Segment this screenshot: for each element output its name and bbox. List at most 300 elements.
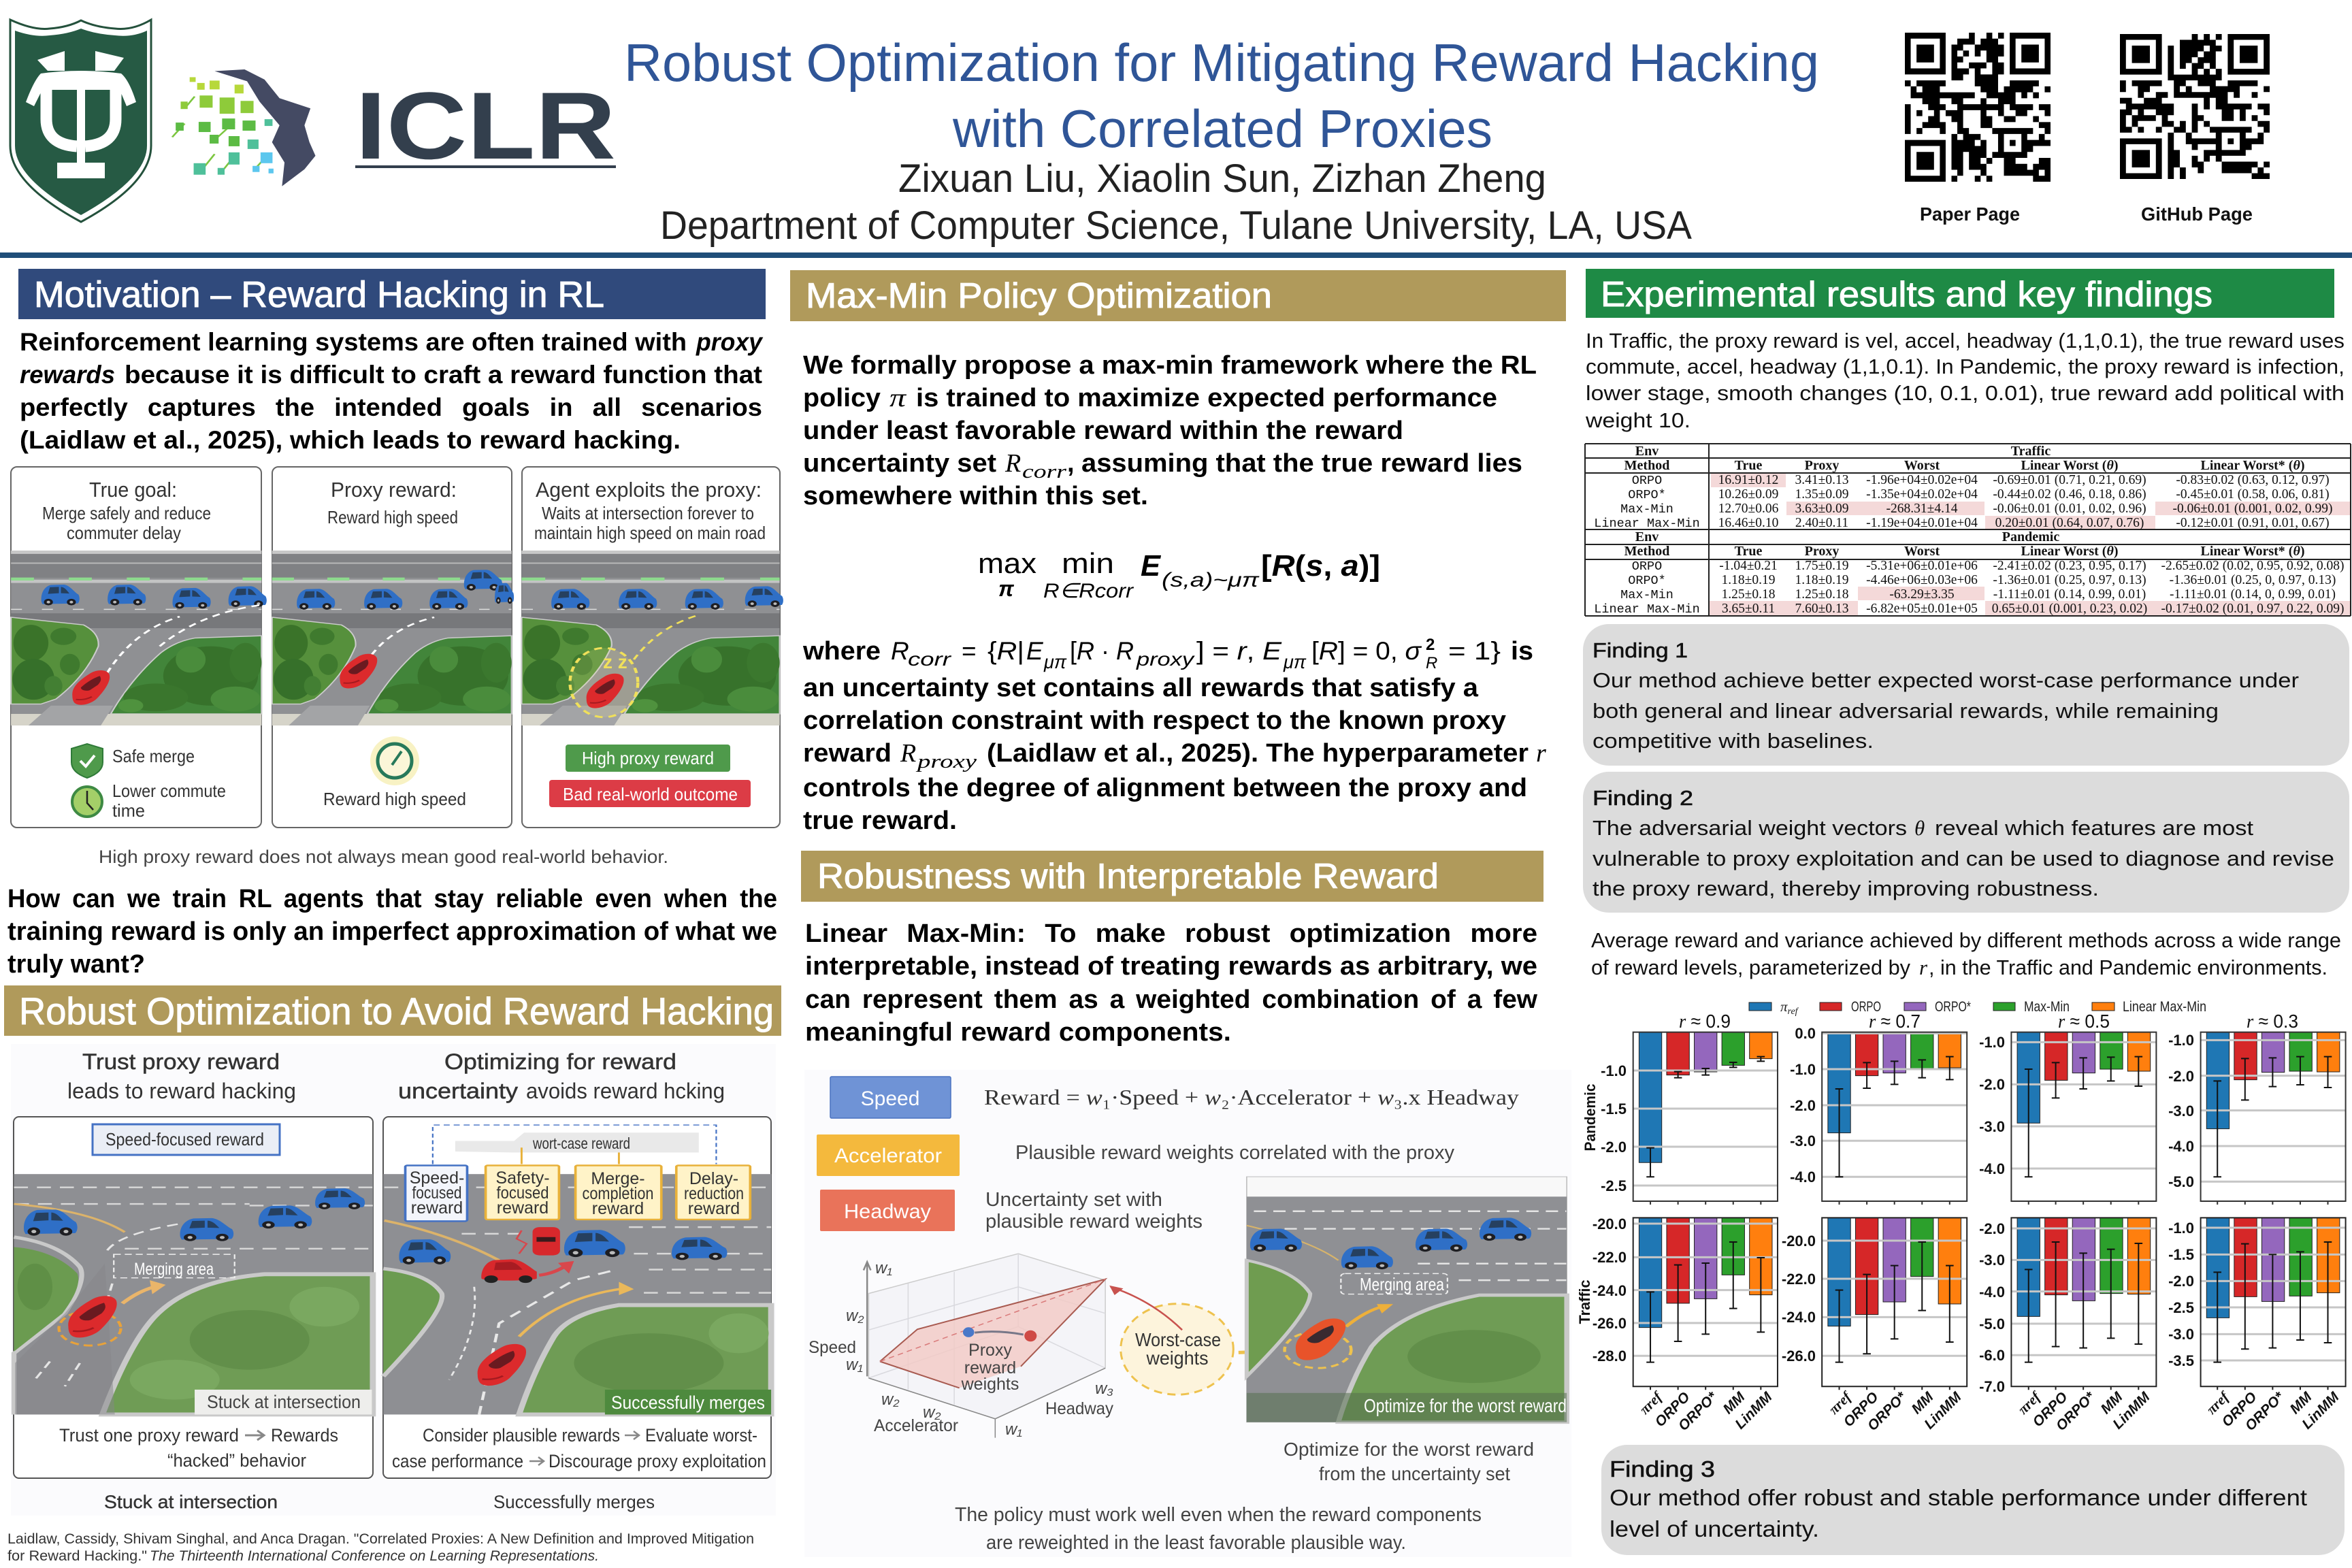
chart: traffic r≈0.9: -22.0 [1592,1249,1627,1266]
chart: traffic r≈0.3: LinMM [2299,1389,2342,1433]
table: results: Max-Min [1620,588,1673,602]
text: plausible weights: Plausible reward weights correlated with the proxy [1015,1142,1454,1164]
text: consider plausible rewards: case performance [392,1451,523,1471]
label: proxy reward weights: reward [964,1358,1016,1377]
chart: traffic r≈0.9: MM [1720,1389,1748,1417]
label: successfully merges overlay: Successfully merges [611,1392,765,1413]
icon: clock [72,787,102,817]
right figure heading: Optimizing for reward [444,1049,676,1074]
panel: robustness [801,851,1571,1557]
chart: traffic r≈0.5: -6.0 [1979,1347,2005,1364]
chart: traffic r≈0.3: ORPO [2219,1389,2260,1430]
chart: traffic r≈0.3: -2.5 [2168,1299,2194,1316]
text block: max-min intro: uncertainty set [803,449,996,478]
text block: max-min intro: corr [1022,461,1066,483]
caption: optimize for worst reward: from the uncertainty set [1319,1463,1510,1484]
chip: accelerator [817,1134,960,1176]
panel: experimental results [1576,269,2351,1555]
chart: traffic r≈0.9: -24.0 [1592,1282,1627,1299]
text block: research question [7,885,777,979]
callout: finding 3: level of uncertainty. [1610,1516,1819,1541]
reward option: merge-completion: Merge- [591,1169,645,1188]
reward option: safety-focused [495,1169,550,1218]
chart: traffic r≈0.9: πref [1636,1388,1666,1418]
QR label: paper: Paper Page [1920,203,2020,225]
chart: pandemic r≈0.7: -1.0 [1790,1061,1816,1078]
text block: chart description: Average reward and variance achieved by different methods across a wide range [1591,928,2341,952]
caption: successfully merges: Successfully merges [493,1492,655,1512]
chart: pandemic r≈0.3 [2168,1011,2346,1205]
table: results: -1.36±0.01 (0.25, 0.97, 0.13) [1993,573,2146,587]
table: results: -1.11±0.01 (0.14, 0.99, 0.01) [1993,587,2146,602]
table: results: -6.82e+05±0.01e+05 [1866,602,1978,616]
table: results: 1.75±0.19 [1795,559,1848,573]
text block: max-min intro: assuming that the true reward lies [1081,449,1522,478]
text block: uncertainty set definition: R [900,739,916,768]
chip: speed [830,1077,951,1118]
table: results: 16.46±0.10 [1718,516,1778,530]
text block: uncertainty set definition: reward [803,739,892,768]
heading: motivation: Motivation – Reward Hacking in RL [34,274,604,315]
chart: pandemic r≈0.9: -1.5 [1601,1100,1627,1117]
table: results: -0.17±0.02 (0.01, 0.97, 0.22, 0.09) [2161,602,2345,616]
text block: max-min intro: somewhere within this set. [803,482,1148,510]
heading: robust optimization: Robust Optimization to Avoid Reward Hacking [19,990,774,1032]
chart: traffic r≈0.3: -1.0 [2168,1220,2194,1237]
panel: max-min [790,270,1566,835]
table: results: 1.25±0.18 [1722,587,1775,602]
badge: bad real-world outcome: Bad real-world outcome [563,784,738,804]
panel: robust optimization [4,985,781,1564]
text block: max-min intro: R [1004,449,1021,478]
chart: pandemic r≈0.5: -4.0 [1979,1160,2005,1177]
chart: traffic r≈0.7: ORPO [1841,1389,1882,1430]
callout: finding 1 [1583,624,2349,766]
table: results: True [1735,458,1762,473]
scene panel: agent exploits the proxy: Agent exploits the proxy: [536,478,762,502]
logo: ICLR brain mark [172,69,316,186]
text block: max-min intro: , [1067,449,1075,478]
table: results: -1.19e+04±0.01e+04 [1866,516,1978,530]
icon: speed gauge [370,736,419,785]
table: results: Method [1624,544,1669,559]
chart: pandemic r≈0.7: -3.0 [1790,1132,1816,1149]
formula: max-min objective: π [998,576,1015,601]
reward option: merge-completion [583,1169,653,1218]
table: results: Linear Max-Min [1594,517,1700,531]
text block: motivation intro: because it is difficult to craft a reward function that [125,361,762,389]
text block: linear max-min [805,919,1537,1047]
text block: uncertainty set definition: ] = r, E [1196,637,1282,665]
panel: motivation [7,269,783,979]
table: results: ORPO* [1628,488,1666,502]
chart: traffic r≈0.5: LinMM [2110,1389,2153,1433]
badge: high proxy reward [566,745,730,772]
badge: bad real-world outcome [549,780,751,807]
text block: max-min intro: is trained to maximize expected performance [916,384,1497,412]
chart: 3D weight space: Speed [808,1338,856,1357]
chart: traffic r≈0.3: MM [2287,1389,2315,1417]
chart: traffic r≈0.3: -3.5 [2168,1352,2194,1369]
table: results: -1.04±0.21 [1719,559,1778,573]
chart: 3D weight space: w₁ [875,1259,892,1277]
reward option: safety-focused: Safety- [495,1169,550,1188]
text block: motivation intro [20,328,764,454]
chart: 3D weight space: Headway [1045,1399,1113,1418]
table: results: 3.63±0.09 [1795,502,1848,516]
table: results: -1.35e+04±0.02e+04 [1866,487,1978,502]
title: Robust Optimization for Mitigating Reward Hacking [624,33,1819,93]
heading: max-min policy optimization: Max-Min Policy Optimization [806,276,1272,316]
reward option: delay-reduction: Delay- [689,1169,738,1188]
chart legend: Max-Min [2024,999,2070,1015]
chart: pandemic r≈0.9: -2.0 [1601,1139,1627,1156]
chip: headway [820,1190,955,1231]
title: with Correlated Proxies [952,99,1492,159]
reward option: merge-completion: reward [592,1199,644,1218]
chart: traffic r≈0.9: ORPO [1652,1389,1693,1430]
chart: traffic r≈0.3: -2.0 [2168,1273,2194,1290]
reward option: safety-focused: focused [497,1183,549,1203]
formula: max-min objective: (s,a)~μπ [1162,569,1260,591]
chart: traffic r≈0.9: ORPO* [1676,1389,1720,1434]
chart: 3D weight space: w₂ [923,1403,941,1422]
chip: accelerator: Accelerator [834,1145,942,1167]
table: results: 3.65±0.11 [1722,602,1775,616]
table: results: 1.18±0.19 [1795,573,1848,587]
figure background [11,1044,776,1516]
chart: pandemic r≈0.3: -4.0 [2168,1138,2194,1155]
scene panel: true goal [11,467,267,828]
illustration: road under worst reward: Optimize for the worst reward [1364,1395,1567,1416]
text: trust one proxy reward: Rewards [271,1425,338,1446]
formula: max-min objective: min [1062,547,1114,579]
chart: traffic r≈0.5: -3.0 [1979,1252,2005,1269]
table: results: -4.46e+06±0.03e+06 [1866,573,1978,587]
table: results: Proxy [1805,544,1839,559]
chip: headway: Headway [844,1200,931,1223]
chart: traffic r≈0.5: MM [2098,1389,2126,1417]
text block: linear max-min: Linear Max-Min: To make robust optimization more [805,919,1537,948]
text block: uncertainty set definition: is [1511,637,1533,666]
heading: max-min policy optimization [790,270,1566,321]
text block: uncertainty set definition: [R] = 0, σ [1311,637,1422,665]
text: consider plausible rewards [392,1425,766,1471]
text block: uncertainty set definition: (Laidlaw et al., 2025). The hyperparameter [987,739,1529,768]
text: trust one proxy reward: Trust one proxy reward [59,1425,239,1446]
text block: uncertainty set definition: 2 [1426,636,1435,654]
chart legend: ORPO [1851,999,1881,1015]
heading: experimental results [1586,269,2334,318]
text block: chart description: , in the Traffic and Pandemic environments. [1929,956,2328,979]
callout: finding 2: the proxy reward, thereby improving robustness. [1592,877,2099,900]
chart legend: Linear Max-Min [2123,999,2206,1015]
table: results: 12.70±0.06 [1718,502,1779,516]
right figure heading: uncertainty [398,1079,518,1103]
caption: policy must work well [955,1504,1482,1554]
table: results: ORPO [1632,559,1662,574]
text block: max-min intro: policy [803,384,881,412]
caption: optimize for worst reward: Optimize for the worst reward [1284,1439,1534,1460]
callout: speed-focused reward [93,1124,280,1155]
illustration: road under worst reward: Merging area [1360,1274,1444,1294]
table: results: -1.96e+04±0.02e+04 [1866,473,1978,487]
chart: traffic r≈0.9: -20.0 [1592,1215,1627,1232]
left figure heading: Trust proxy reward [82,1049,280,1074]
table: results: -0.06±0.01 (0.001, 0.02, 0.99) [2173,502,2332,516]
table: results: ORPO [1632,474,1662,488]
callout: finding 2: θ [1914,816,1925,840]
table: results [1585,444,2351,617]
icon: shield check [71,744,103,778]
table: results: -0.45±0.01 (0.58, 0.06, 0.81) [2176,487,2330,502]
table: results: Method [1624,458,1669,473]
scene panel: true goal: True goal: [89,478,177,502]
illustration: merging road [383,1125,771,1414]
chart: traffic r≈0.9: LinMM [1732,1389,1776,1433]
label: proxy reward weights: weights [961,1375,1019,1394]
chart: traffic r≈0.5: -5.0 [1979,1316,2005,1333]
chart: traffic r≈0.7: -24.0 [1782,1309,1816,1326]
table: results: 1.25±0.18 [1795,587,1848,602]
QR code: paper page [1905,35,2051,179]
table: results: 7.60±0.13 [1795,602,1848,616]
illustration: merge road [11,551,267,725]
table: results: Traffic [2011,444,2051,459]
table: results: -0.69±0.01 (0.71, 0.21, 0.69) [1993,473,2146,487]
table: results: -268.31±4.14 [1886,502,1958,516]
chart: traffic r≈0.7: MM [1909,1389,1937,1417]
chart: traffic r≈0.3: -3.0 [2168,1326,2194,1343]
chart: pandemic r≈0.7: r ≈ 0.7 [1869,1011,1921,1032]
table: results: Max-Min [1620,502,1673,517]
chart: traffic r≈0.7: -26.0 [1782,1348,1816,1365]
formula: reward: Reward = w₁·Speed + w₂·Accelerator + w₃.x Headway [984,1085,1519,1109]
chart: traffic r≈0.7: ORPO* [1865,1389,1910,1434]
caption: optimize for worst reward [1284,1439,1534,1484]
table: results: 1.35±0.09 [1795,487,1848,502]
chart: traffic r≈0.5: ORPO [2030,1389,2071,1430]
text block: max-min intro: We formally propose a max-min framework where the RL [803,351,1537,380]
authors: Zixuan Liu, Xiaolin Sun, Zizhan Zheng [898,157,1546,201]
text: trust one proxy reward [59,1425,338,1471]
text: trust one proxy reward: “hacked” behavior [167,1450,306,1471]
table: results: Linear Worst* (θ) [2201,458,2304,473]
table: results: -0.06±0.01 (0.01, 0.02, 0.96) [1993,502,2146,516]
table: results: -1.11±0.01 (0.14, 0, 0.99, 0.01) [2170,587,2336,602]
table: results: Worst [1904,458,1940,473]
formula: max-min objective: E [1141,549,1162,583]
text block: environment description: weight 10. [1585,408,1690,432]
chart: pandemic r≈0.3: -1.0 [2168,1032,2194,1049]
text block: uncertainty set definition: [R · R [1070,637,1134,665]
text block: research question: truly want? [7,950,145,979]
zzz mark: z z [603,651,627,672]
chart: traffic r≈0.7 [1782,1218,1967,1434]
text block: motivation intro: Reinforcement learning systems are often trained with [20,328,687,356]
text block: max-min intro: under least favorable reward within the reward [803,416,1403,445]
chart: traffic r≈0.9: -26.0 [1592,1315,1627,1332]
chart: pandemic r≈0.5: -3.0 [1979,1118,2005,1135]
chart: pandemic r≈0.3: -5.0 [2168,1173,2194,1190]
reward option: delay-reduction: reward [688,1199,740,1218]
text block: environment description: lower stage, smooth changes (10, 0.1, 0.01), true reward add political with [1586,381,2345,405]
chart: traffic r≈0.7: -22.0 [1782,1271,1816,1288]
scene panel: true goal: commuter delay [67,523,181,543]
caption: policy must work well: are reweighted in the least favorable plausible way. [986,1532,1406,1554]
text block: uncertainty set definition: proxy [915,751,977,772]
callout: finding 2: reveal which features are most [1935,816,2253,840]
callout: finding 2: The adversarial weight vectors [1592,816,1907,840]
chart: pandemic r≈0.7: -2.0 [1790,1097,1816,1114]
text block: linear max-min: can represent them as a weighted combination of a few [805,985,1537,1014]
heading: motivation [18,269,766,319]
affiliation: Department of Computer Science, Tulane University, LA, USA [660,203,1692,248]
chart: traffic r≈0.5: -7.0 [1979,1378,2005,1395]
label: stuck at intersection overlay: Stuck at intersection [207,1392,361,1412]
chart legend [1749,998,2206,1017]
table: results: Linear Worst (θ) [2021,544,2118,559]
text: uncertainty set: plausible reward weights [985,1211,1203,1232]
title [624,33,1819,159]
text block: environment description: commute, accel, headway (1,1,0.1). In Pandemic, the proxy reward is infection, [1586,355,2345,378]
chart: traffic r≈0.3: πref [2203,1388,2233,1418]
text block: motivation intro: proxy [696,328,764,356]
callout: worst-case weights: weights [1146,1348,1209,1369]
chart: pandemic r≈0.9 [1601,1011,1778,1205]
chart: pandemic r≈0.3: -3.0 [2168,1102,2194,1120]
text block: uncertainty set definition: corr [908,649,952,670]
table: results: Proxy [1805,458,1839,473]
text block: linear max-min: meaningful reward components. [805,1018,1231,1047]
reward option: delay-reduction [684,1169,744,1218]
chart: 3D weight space: w₃ [1095,1379,1113,1398]
table: results: -5.31e+06±0.01e+06 [1866,559,1978,573]
chart: 3D weight space: Accelerator [874,1416,958,1435]
callout: finding 1: competitive with baselines. [1592,729,1874,753]
text block: uncertainty set definition: μπ [1283,652,1307,672]
chart: pandemic r≈0.5: r ≈ 0.5 [2058,1011,2110,1032]
callout: finding 1: Our method achieve better expected worst-case performance under [1592,668,2299,692]
text block: uncertainty set definition: r [1536,739,1546,768]
scene panel: proxy reward: Proxy reward: [331,478,457,502]
chart: traffic r≈0.5: ORPO* [2053,1389,2098,1434]
text block: chart description: r [1919,956,1928,979]
chart: traffic r≈0.5 [1979,1218,2156,1434]
callout: finding 2: vulnerable to proxy exploitation and can be used to diagnose and revise [1592,847,2334,870]
text: consider plausible rewards: Consider plausible rewards [423,1425,620,1446]
scene panel: true goal: Merge safely and reduce [42,503,211,523]
right figure heading [398,1049,725,1103]
scene panel: agent exploits the proxy: Waits at intersection forever to [542,503,754,523]
scene panel: proxy reward [272,467,514,828]
illustration: waiting road [521,551,783,725]
header rule [0,252,2352,258]
illustration: road under worst reward [1247,1177,1567,1422]
chart: traffic r≈0.3 [2168,1218,2346,1434]
chart: pandemic r≈0.9: -2.5 [1601,1177,1627,1194]
panel: optimizing for uncertainty [383,1117,771,1478]
text block: motivation intro: perfectly captures the intended goals in all scenarios [20,393,762,421]
chart: pandemic r≈0.7: -4.0 [1790,1169,1816,1186]
illustration: speeding road [272,551,514,725]
text block: uncertainty set definition: controls the degree of alignment between the proxy and [803,774,1527,802]
caption: stuck at intersection: Stuck at intersection [104,1492,278,1512]
citation: Laidlaw, Cassidy, Shivam Singhal, and Anca Dragan. "Correlated Proxies: A New Definition and Improved Mitigation [7,1531,754,1547]
reward option: merge-completion: completion [583,1184,653,1203]
label: lower commute time: time [112,800,145,821]
chart: traffic r≈0.3: -1.5 [2168,1246,2194,1263]
text block: uncertainty set definition: true reward. [803,806,957,835]
text: uncertainty set [985,1189,1203,1232]
chart legend: π [1780,998,1788,1015]
text block: research question: How can we train RL agents that stay reliable even when the [7,885,777,913]
text block: research question: training reward is only an imperfect approximation of what we [7,917,777,946]
table: results: -2.65±0.02 (0.02, 0.95, 0.92, 0.08) [2161,559,2345,573]
text block: uncertainty set definition: proxy [1136,649,1195,670]
table: results: Env [1635,444,1659,459]
reward option: delay-reduction: reduction [684,1184,744,1203]
label: lower commute time [112,781,226,821]
QR label: GitHub: GitHub Page [2141,203,2253,225]
callout: finding 1: both general and linear adversarial rewards, while remaining [1592,699,2219,723]
reward option: speed-focused: Speed- [410,1169,464,1188]
logo: Tulane shield [10,20,151,222]
illustration: stuck road [14,1174,373,1414]
chart: pandemic r≈0.3: -2.0 [2168,1068,2194,1085]
left figure heading [67,1049,296,1103]
citation: The Thirteenth International Conference on Learning Representations. [150,1548,599,1564]
label: worst-case reward: wort-case reward [532,1134,630,1152]
table: results: Worst [1904,544,1940,559]
table: results: -63.29±3.35 [1889,587,1955,602]
axis label: traffic: Traffic [1576,1279,1593,1324]
text block: environment description [1585,329,2345,432]
scene panel: proxy reward: Reward high speed [327,507,458,527]
formula: max-min objective [978,547,1380,602]
table: results: -0.12±0.01 (0.91, 0.01, 0.67) [2176,516,2330,530]
chart: traffic r≈0.5: πref [2014,1388,2044,1418]
text: consider plausible rewards: Evaluate worst- [645,1425,757,1446]
chip: speed: Speed [861,1088,919,1110]
text block: uncertainty set definition: R [891,637,909,665]
chart: traffic r≈0.3: ORPO* [2242,1389,2287,1434]
table: results: Linear Worst (θ) [2021,458,2118,473]
table: results: Linear Worst* (θ) [2201,544,2304,559]
table: results: -2.41±0.02 (0.23, 0.95, 0.17) [1993,559,2146,573]
chart: 3D weight space [808,1254,1113,1439]
chart: pandemic r≈0.5: -2.0 [1979,1076,2005,1093]
callout: finding 3: Our method offer robust and stable performance under different [1610,1485,2307,1510]
text block: chart description [1591,928,2341,979]
text block: uncertainty set definition: {R| [987,637,1024,665]
table: results: True [1735,544,1762,559]
text block: uncertainty set definition: R [1426,654,1437,672]
chart legend: ORPO* [1935,999,1971,1015]
callout: speed-focused reward: Speed-focused reward [105,1129,264,1149]
logo: ICLR wordmark: ICLR [355,72,616,179]
text block: environment description: In Traffic, the proxy reward is vel, accel, headway (1,1,0.1), the true reward uses [1586,329,2345,353]
text block: max-min intro: π [889,384,906,412]
formula: max-min objective: R∈Rcorr [1043,580,1134,602]
chart: pandemic r≈0.5: -1.0 [1979,1034,2005,1051]
chart: pandemic r≈0.9: -1.0 [1601,1062,1627,1079]
text block: motivation intro: (Laidlaw et al., 2025), which leads to reward hacking. [20,426,681,454]
table: results: 16.91±0.12 [1718,473,1778,487]
chart: traffic r≈0.5: -4.0 [1979,1284,2005,1301]
table: results: -0.44±0.02 (0.46, 0.18, 0.86) [1993,487,2146,502]
heading: robustness with interpretable reward: Robustness with Interpretable Reward [817,857,1439,896]
